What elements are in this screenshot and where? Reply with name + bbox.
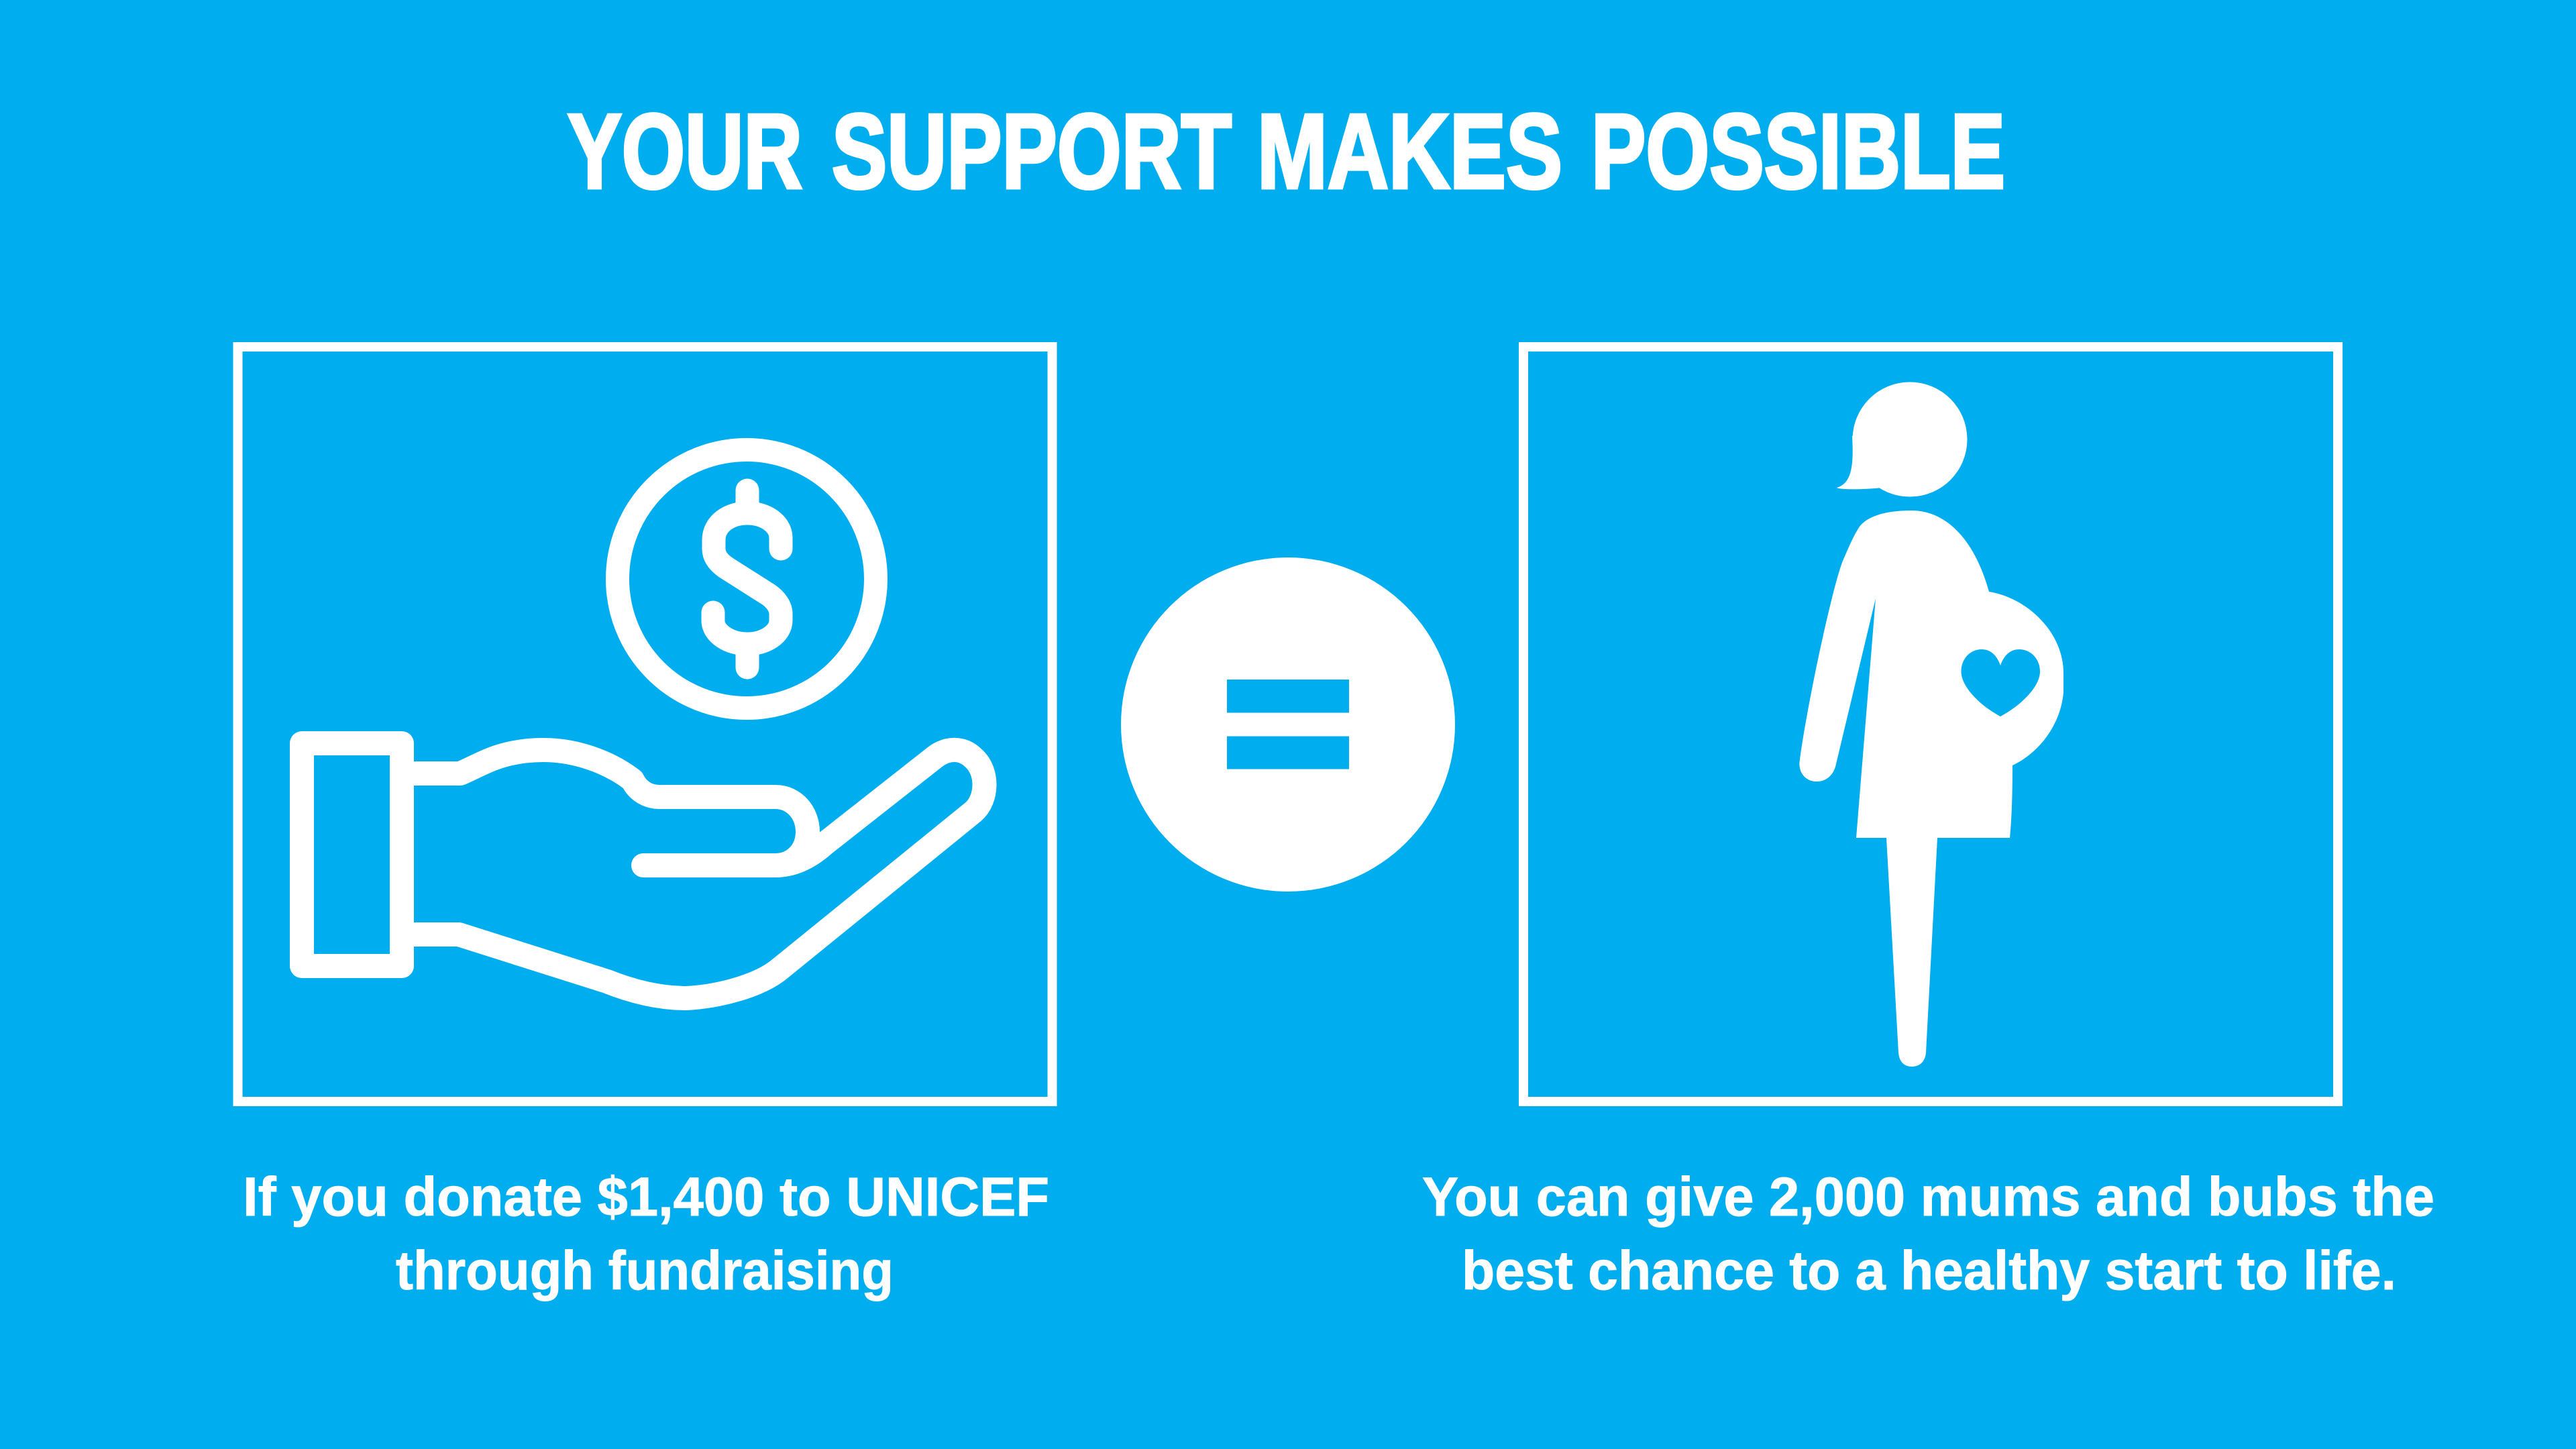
caption: impact (1422, 1167, 2434, 1301)
icon: equals sign in circle (1121, 557, 1455, 892)
caption: donation: If you donate $1,400 to UNICEF (243, 1167, 1049, 1228)
caption: donation: through fundraising (396, 1240, 894, 1301)
title: YOUR (568, 93, 802, 211)
caption: impact: You can give 2,000 mums and bubs the (1422, 1167, 2434, 1228)
caption: donation (243, 1167, 1049, 1301)
panel: donation (237, 347, 1052, 1102)
title: SUPPORT (832, 93, 1232, 211)
icon: pregnant woman (1799, 382, 2063, 1067)
title: MAKES (1257, 93, 1562, 211)
panel frame: donation (237, 347, 1052, 1102)
title (568, 93, 2005, 211)
panel: pregnant mother (1523, 347, 2338, 1102)
title: POSSIBLE (1591, 93, 2005, 211)
icon: coin with dollar sign (617, 449, 876, 708)
icon: open hand (302, 743, 985, 998)
caption: impact: best chance to a healthy start to life. (1462, 1240, 2396, 1301)
panel frame: pregnant mother (1523, 347, 2338, 1102)
